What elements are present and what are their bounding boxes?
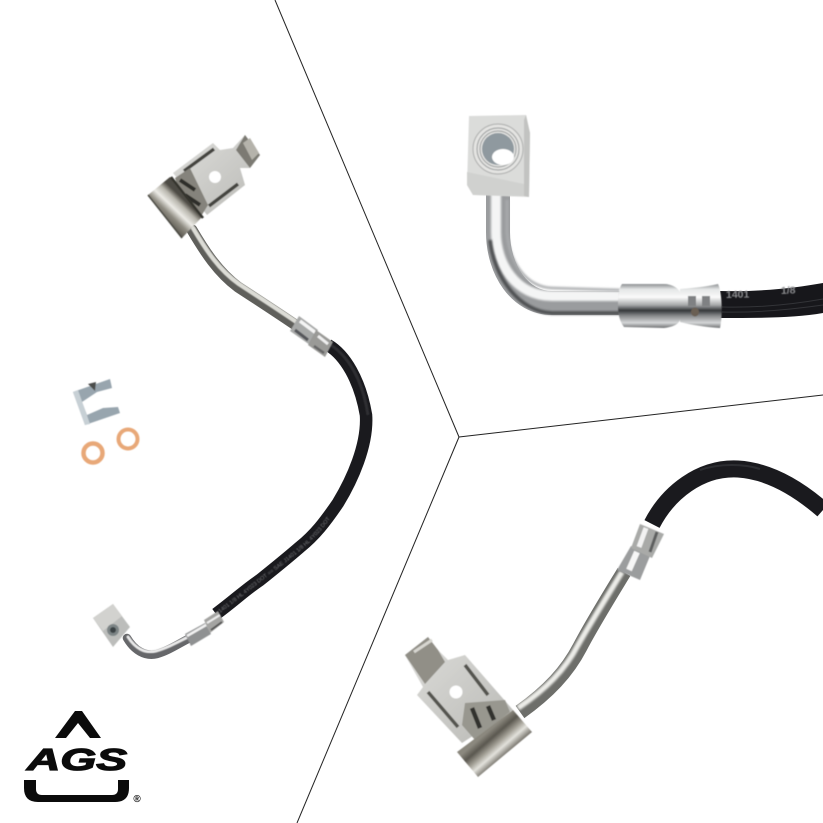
hose print: 1401 1/8 HL 4Y023 DOT == SAE J1401 1/8 HL 4Y023 DOT <box>218 516 330 613</box>
panel: bracket end close-up <box>405 465 823 777</box>
divider lines <box>275 0 823 823</box>
bracket bottom view <box>405 637 532 777</box>
ferrule bottom view <box>617 524 664 580</box>
logo chevron <box>55 711 101 738</box>
logo: AGS <box>24 711 141 805</box>
hose close-up: 1/8 <box>781 284 796 297</box>
bent steel tube <box>490 186 620 313</box>
hose close-up <box>720 283 823 318</box>
lower crimp ferrule <box>185 611 224 646</box>
bracket: mounting clip <box>148 135 260 238</box>
metal tube upper <box>192 228 298 326</box>
upper crimp ferrule <box>290 316 333 357</box>
tube bottom view <box>518 572 624 712</box>
logo tray <box>24 780 129 802</box>
hose bottom view <box>652 465 823 524</box>
icon: retaining clip <box>73 379 120 425</box>
icon: copper washers <box>84 430 138 462</box>
lower metal tube <box>127 636 190 655</box>
panel: full brake hose assembly <box>92 134 372 659</box>
lower banjo block <box>93 604 130 647</box>
hose print close-up: 1401 <box>726 289 750 301</box>
registered mark: ® <box>133 794 141 805</box>
panel: banjo fitting close-up <box>467 115 823 328</box>
large crimp ferrule <box>618 284 722 328</box>
logo wordmark: AGS <box>26 742 127 777</box>
hose: main black rubber hose <box>212 340 372 618</box>
fitting block <box>467 115 530 197</box>
